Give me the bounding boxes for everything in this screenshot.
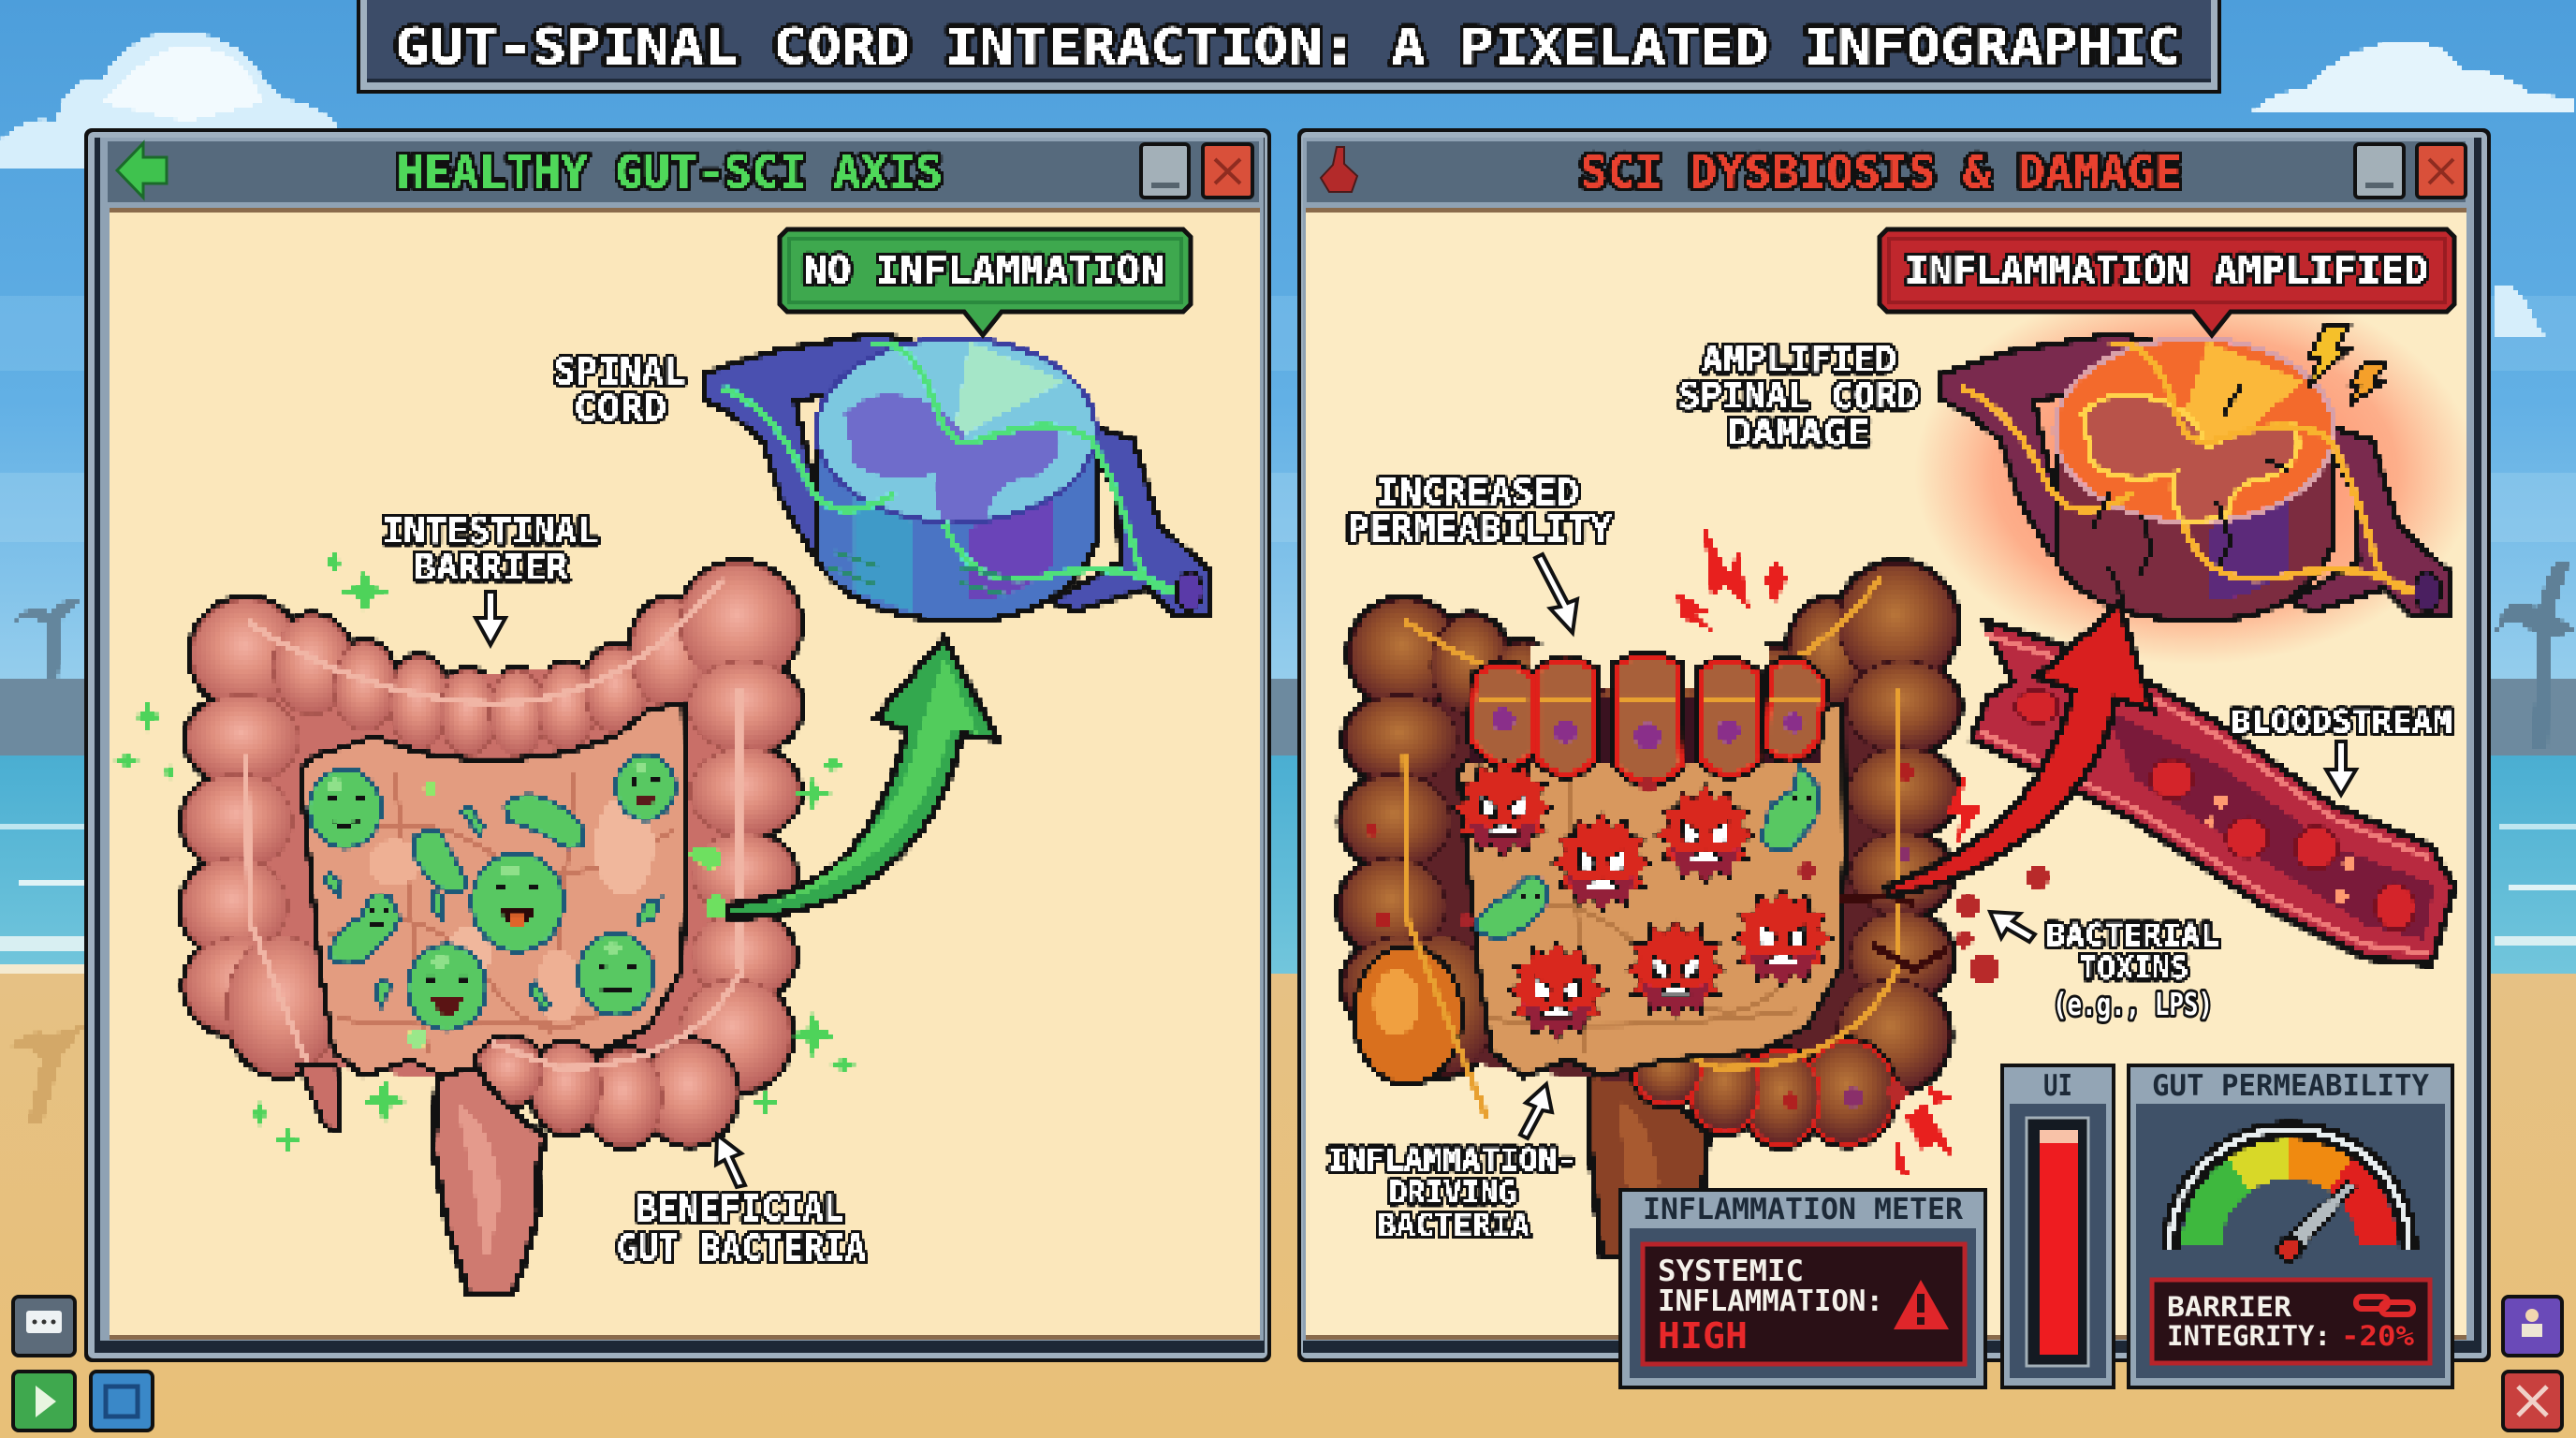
right window frame — [1297, 128, 2491, 1362]
title banner — [357, 0, 2221, 94]
green sparkles — [114, 550, 855, 1152]
arrow: bacterial toxins — [1990, 912, 2035, 942]
widget: gut permeability gauge: INTEGRITY: — [2167, 1320, 2331, 1352]
icon: green arrow — [117, 143, 167, 198]
label: increased permeability: INCREASED — [1377, 472, 1579, 513]
left window heading: HEALTHY GUT-SCI AXIS — [397, 147, 943, 198]
arrow: gut to spinal cord (healthy) — [727, 638, 997, 917]
label: beneficial gut bacteria: GUT BACTERIA — [617, 1227, 866, 1269]
widget: gut permeability gauge: GUT PERMEABILITY — [2152, 1069, 2429, 1103]
callout: no inflammation: NO INFLAMMATION — [803, 247, 1164, 293]
bottom-right game buttons — [2503, 1297, 2562, 1431]
panel: healthy gut-SCI axis — [84, 128, 1271, 1362]
inflammation-driving bacteria — [1451, 756, 1835, 1043]
illustration: healthy spinal cord — [703, 333, 1210, 621]
illustration: bloodstream vessel — [1971, 621, 2454, 964]
arrow: bloodstream — [2326, 741, 2356, 795]
widget: UI bar: UI — [2043, 1069, 2072, 1103]
colon body — [1340, 564, 1958, 1145]
cecum — [1354, 946, 1462, 1084]
label: bacterial toxins — [2046, 917, 2219, 1022]
illustration: inflamed intestine — [1340, 564, 1958, 1257]
button: close — [2503, 1372, 2562, 1431]
label: inflammation-driving bacteria: DRIVING — [1389, 1174, 1516, 1211]
label: amplified spinal cord damage: DAMAGE — [1728, 412, 1870, 453]
callout: inflammation amplified — [1880, 229, 2454, 335]
window buttons — [2355, 144, 2466, 198]
colon body — [183, 564, 800, 1117]
label: increased permeability: PERMEABILITY — [1347, 508, 1612, 550]
icon: red bacterium — [1321, 147, 1357, 192]
illustration: healthy intestine — [183, 564, 800, 1293]
icon: warning triangle — [1894, 1280, 1949, 1329]
arrow: gut to spinal cord (inflamed) — [1886, 605, 2152, 895]
bottom-left game buttons — [13, 1297, 153, 1431]
transverse capsules with red outline — [1471, 644, 1827, 782]
mesentery — [1458, 703, 1845, 1077]
widget: inflammation meter: SYSTEMIC — [1658, 1255, 1804, 1288]
widget: gut permeability gauge — [2127, 1064, 2454, 1389]
illustration: damaged spinal cord — [1941, 333, 2449, 621]
panel: SCI dysbiosis and damage — [1297, 128, 2491, 1389]
label: bloodstream: BLOODSTREAM — [2231, 703, 2452, 740]
button: chat — [13, 1297, 75, 1356]
label: beneficial gut bacteria — [617, 1188, 866, 1269]
icon: yellow lightning bolts — [2308, 325, 2385, 404]
title banner: GUT-SPINAL CORD INTERACTION: A PIXELATED INFOGRAPHIC — [395, 19, 2181, 76]
button: save — [91, 1372, 153, 1431]
label: bacterial toxins: (e.g., LPS) — [2053, 986, 2213, 1022]
label: intestinal barrier: INTESTINAL — [382, 510, 598, 551]
widget: inflammation meter: HIGH — [1658, 1315, 1748, 1357]
label: amplified spinal cord damage: AMPLIFIED — [1702, 339, 1896, 380]
clouds and palms — [0, 32, 2576, 1123]
mesentery — [300, 703, 687, 1077]
label: spinal cord: CORD — [574, 388, 666, 429]
sigmoid lumps — [476, 969, 742, 1145]
label: inflammation-driving bacteria: BACTERIA — [1377, 1207, 1530, 1243]
widget: gut permeability gauge: BARRIER — [2167, 1291, 2292, 1323]
spots on haustra — [1365, 764, 1914, 1109]
label: intestinal barrier — [382, 510, 598, 588]
button: character — [2503, 1297, 2562, 1356]
label: spinal cord — [554, 351, 685, 429]
gauge dial — [2164, 1123, 2415, 1260]
label: amplified spinal cord damage — [1678, 339, 1919, 453]
widget: inflammation meter: INFLAMMATION: — [1658, 1284, 1883, 1318]
right window heading: SCI DYSBIOSIS & DAMAGE — [1580, 147, 2182, 198]
glow behind damaged spinal cord — [1914, 281, 2476, 665]
breach — [1840, 895, 1947, 969]
arrow: intestinal barrier — [476, 592, 505, 645]
left window frame — [84, 128, 1271, 1362]
label: bacterial toxins: TOXINS — [2079, 949, 2188, 986]
red lightning and toxins — [1676, 526, 2048, 1175]
label: spinal cord: SPINAL — [554, 351, 685, 392]
arrow: inflammation-driving bacteria — [1520, 1084, 1552, 1138]
label: increased permeability — [1347, 472, 1612, 550]
icon: broken link — [2356, 1297, 2413, 1314]
label: bacterial toxins: BACTERIAL — [2046, 917, 2219, 953]
callout: no inflammation — [780, 229, 1191, 335]
widget: UI bar — [2000, 1064, 2115, 1389]
beneficial bacteria — [309, 755, 727, 1049]
window buttons — [1141, 144, 1252, 198]
arrow: beneficial bacteria — [716, 1135, 745, 1187]
label: amplified spinal cord damage: SPINAL CORD — [1678, 375, 1919, 417]
arrow: increased permeability — [1535, 554, 1577, 633]
rectum dark — [1590, 1076, 1708, 1257]
widget: inflammation meter — [1618, 1188, 1987, 1389]
callout: inflammation amplified: INFLAMMATION AMPLIFIED — [1905, 247, 2428, 293]
button: play — [13, 1372, 75, 1431]
widget: gut permeability gauge: -20% — [2341, 1320, 2415, 1352]
widget: inflammation meter: INFLAMMATION METER — [1643, 1193, 1963, 1226]
label: beneficial gut bacteria: BENEFICIAL — [637, 1188, 844, 1229]
rectum — [433, 1068, 546, 1293]
label: inflammation-driving bacteria — [1327, 1141, 1576, 1243]
label: intestinal barrier: BARRIER — [414, 547, 568, 588]
label: inflammation-driving bacteria: INFLAMMATION- — [1327, 1141, 1576, 1178]
